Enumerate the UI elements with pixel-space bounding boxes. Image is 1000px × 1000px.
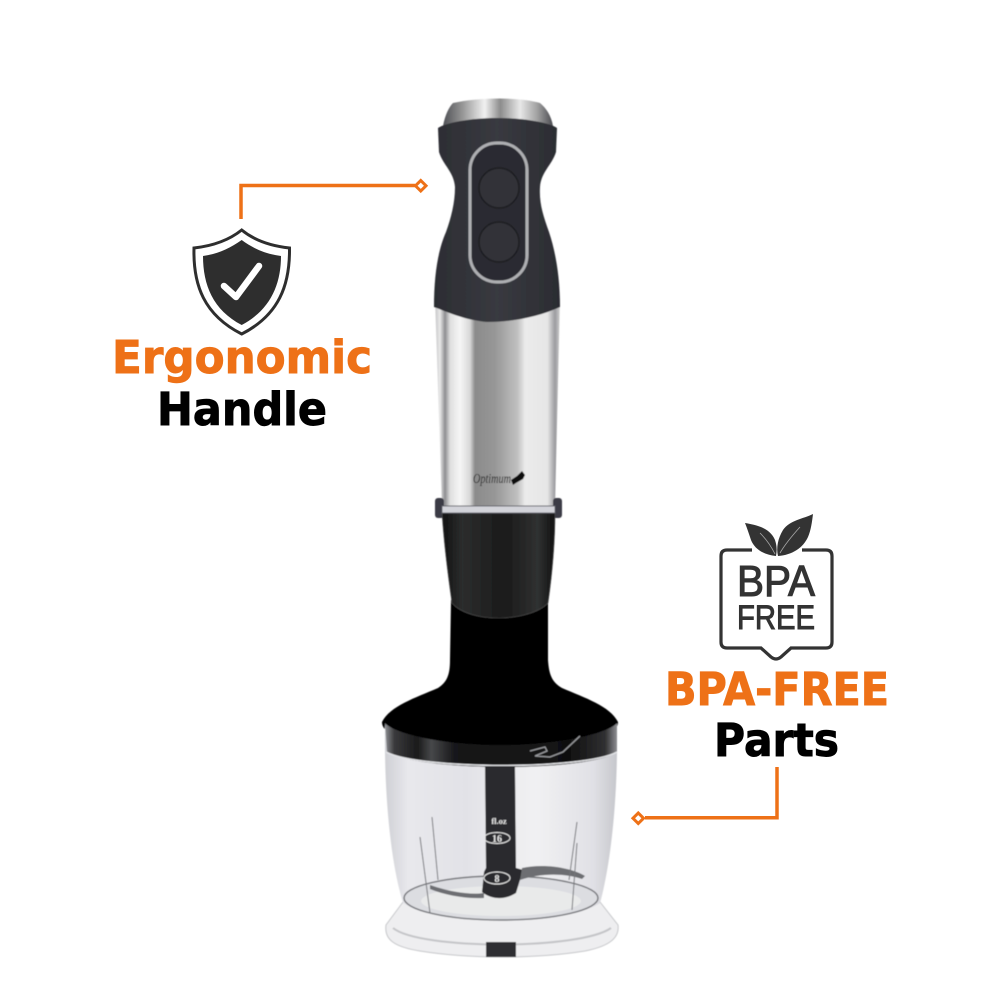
heading: BPA-FREE: BPA-FREE: [665, 663, 889, 716]
release button right: [553, 498, 562, 518]
lid band lower edge: [386, 752, 617, 766]
8 mark: 8: [494, 874, 500, 885]
blade left: [430, 885, 484, 898]
speed button: [479, 222, 519, 262]
base inner rim: [393, 928, 611, 944]
rib right outer: [572, 843, 577, 910]
check mark: [224, 266, 259, 297]
brand logo: [473, 471, 525, 487]
chrome ring: [442, 506, 555, 513]
callout: BPA-free parts: [633, 514, 889, 824]
dark lid band: [385, 723, 617, 767]
button panel ring: [470, 143, 527, 282]
black collar: [442, 512, 555, 618]
icon: shield with check: [194, 230, 290, 334]
callout: ergonomic handle: [112, 180, 426, 436]
rib right inner: [569, 822, 577, 880]
base notch: [486, 942, 516, 957]
8 oval: [484, 872, 510, 884]
connector line: [645, 767, 777, 818]
transparent base: [386, 902, 618, 957]
16 oval: [484, 832, 510, 844]
badge outline: [721, 550, 832, 659]
blade right: [520, 866, 585, 880]
blade assembly neck and cone: [382, 600, 618, 744]
central column: [482, 766, 523, 898]
icon: BPA free badge: [721, 514, 832, 659]
measurement labels: [484, 816, 510, 885]
16 mark: 16: [492, 834, 502, 845]
cone underside: [384, 722, 618, 745]
bowl wall: [385, 725, 617, 920]
left leaf: [745, 523, 777, 556]
right leaf: [777, 514, 813, 556]
bowl floor: [404, 876, 598, 920]
BPA text: BPA: [737, 557, 816, 606]
connector line: [241, 186, 415, 219]
logo wordmark: Optimum: [473, 472, 511, 487]
hand blender product: [382, 98, 618, 957]
button panel: [470, 143, 527, 282]
shield outline: [194, 230, 290, 334]
rib left outer: [420, 837, 430, 913]
leaf veins: [760, 527, 800, 554]
bowl floor highlight: [421, 886, 581, 916]
lid latch: [530, 736, 580, 757]
motor housing: metal cap: [443, 98, 553, 126]
heading: Handle: Handle: [157, 383, 327, 436]
bowl ribs: [420, 817, 577, 913]
stainless steel shaft: [435, 298, 560, 508]
FREE text: FREE: [737, 599, 815, 637]
power button: [479, 168, 519, 208]
heading: Ergonomic: Ergonomic: [112, 331, 372, 384]
connector diamond: [633, 813, 644, 824]
connector diamond: [415, 180, 426, 191]
fl.oz label: fl.oz: [491, 816, 507, 826]
heading: Parts: Parts: [714, 714, 839, 767]
release button left: [435, 498, 444, 518]
logo mascot: [511, 471, 525, 485]
chopper bowl: [384, 722, 618, 957]
rib left inner: [432, 817, 438, 880]
shield fill: [203, 240, 281, 325]
ergonomic grip: [434, 118, 560, 322]
